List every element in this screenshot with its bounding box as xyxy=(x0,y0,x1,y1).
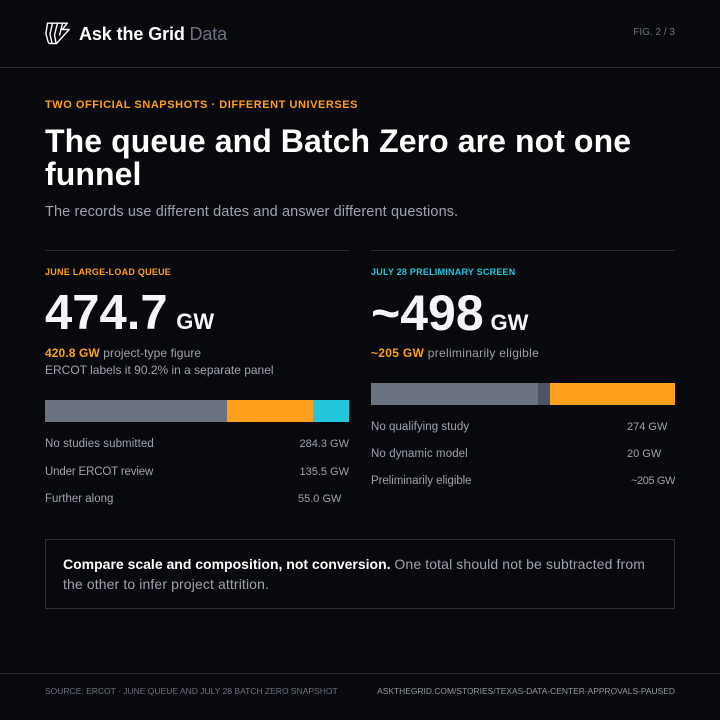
big number: ~498 GW xyxy=(371,285,528,341)
row: eligible: Preliminarily eligible xyxy=(371,475,472,487)
source: SOURCE: ERCOT · JUNE QUEUE AND JULY 28 BATCH ZERO SNAPSHOT xyxy=(45,686,338,696)
segment: eligible xyxy=(550,383,675,405)
row: no model: 20 GW xyxy=(627,448,661,460)
panel: June queue xyxy=(45,250,349,511)
footer xyxy=(0,673,720,720)
row: no study: No qualifying study xyxy=(371,421,469,433)
segment: no model xyxy=(538,383,550,405)
row: no studies xyxy=(45,438,349,450)
stacked bar xyxy=(45,400,349,422)
brand name: Ask the Grid Data xyxy=(79,24,227,44)
row: eligible xyxy=(371,475,676,487)
subtitle: The records use different dates and answer different questions. xyxy=(45,204,458,220)
panel label: JUNE LARGE-LOAD QUEUE xyxy=(45,267,171,277)
panel label: JULY 28 PRELIMINARY SCREEN xyxy=(371,267,516,277)
row: no model: No dynamic model xyxy=(371,448,468,460)
figure number: FIG. 2 / 3 xyxy=(633,27,675,38)
title: The queue and Batch Zero are not one xyxy=(45,123,631,159)
row: further along: 55.0 GW xyxy=(298,493,341,505)
note xyxy=(45,346,274,377)
callout text xyxy=(63,556,645,592)
callout text: the other to infer project attrition. xyxy=(63,576,269,592)
note: 420.8 GW project-type figure xyxy=(45,346,201,360)
callout xyxy=(45,539,675,609)
row: no model xyxy=(371,448,662,460)
stacked bar xyxy=(371,383,675,405)
big number: 474.7 GW xyxy=(45,286,214,340)
panel: July screen xyxy=(371,250,675,491)
row: further along: Further along xyxy=(45,493,113,505)
eyebrow: TWO OFFICIAL SNAPSHOTS · DIFFERENT UNIVERSES xyxy=(45,99,358,111)
row: eligible: ~205 GW xyxy=(631,475,675,487)
row: no study: 274 GW xyxy=(627,421,667,433)
row: no studies: No studies submitted xyxy=(45,438,154,450)
row: further along xyxy=(45,493,342,505)
note: ERCOT labels it 90.2% in a separate panel xyxy=(45,363,274,377)
note: ~205 GW preliminarily eligible xyxy=(371,346,539,360)
row: under review: Under ERCOT review xyxy=(45,466,153,478)
url: ASKTHEGRID.COM/STORIES/TEXAS-DATA-CENTER-APPROVALS-PAUSED xyxy=(377,686,675,696)
segment: further along xyxy=(313,400,349,422)
title: funnel xyxy=(45,156,141,192)
icon: lightning logo xyxy=(45,22,70,44)
row: under review: 135.5 GW xyxy=(299,466,349,478)
row: no study xyxy=(371,421,668,433)
header bar xyxy=(0,0,720,68)
row: no studies: 284.3 GW xyxy=(299,438,349,450)
segment: under review xyxy=(227,400,313,422)
row: under review xyxy=(45,466,349,478)
callout text: Compare scale and composition, not conversion. One total should not be subtracted from xyxy=(63,556,645,572)
title xyxy=(45,123,631,192)
